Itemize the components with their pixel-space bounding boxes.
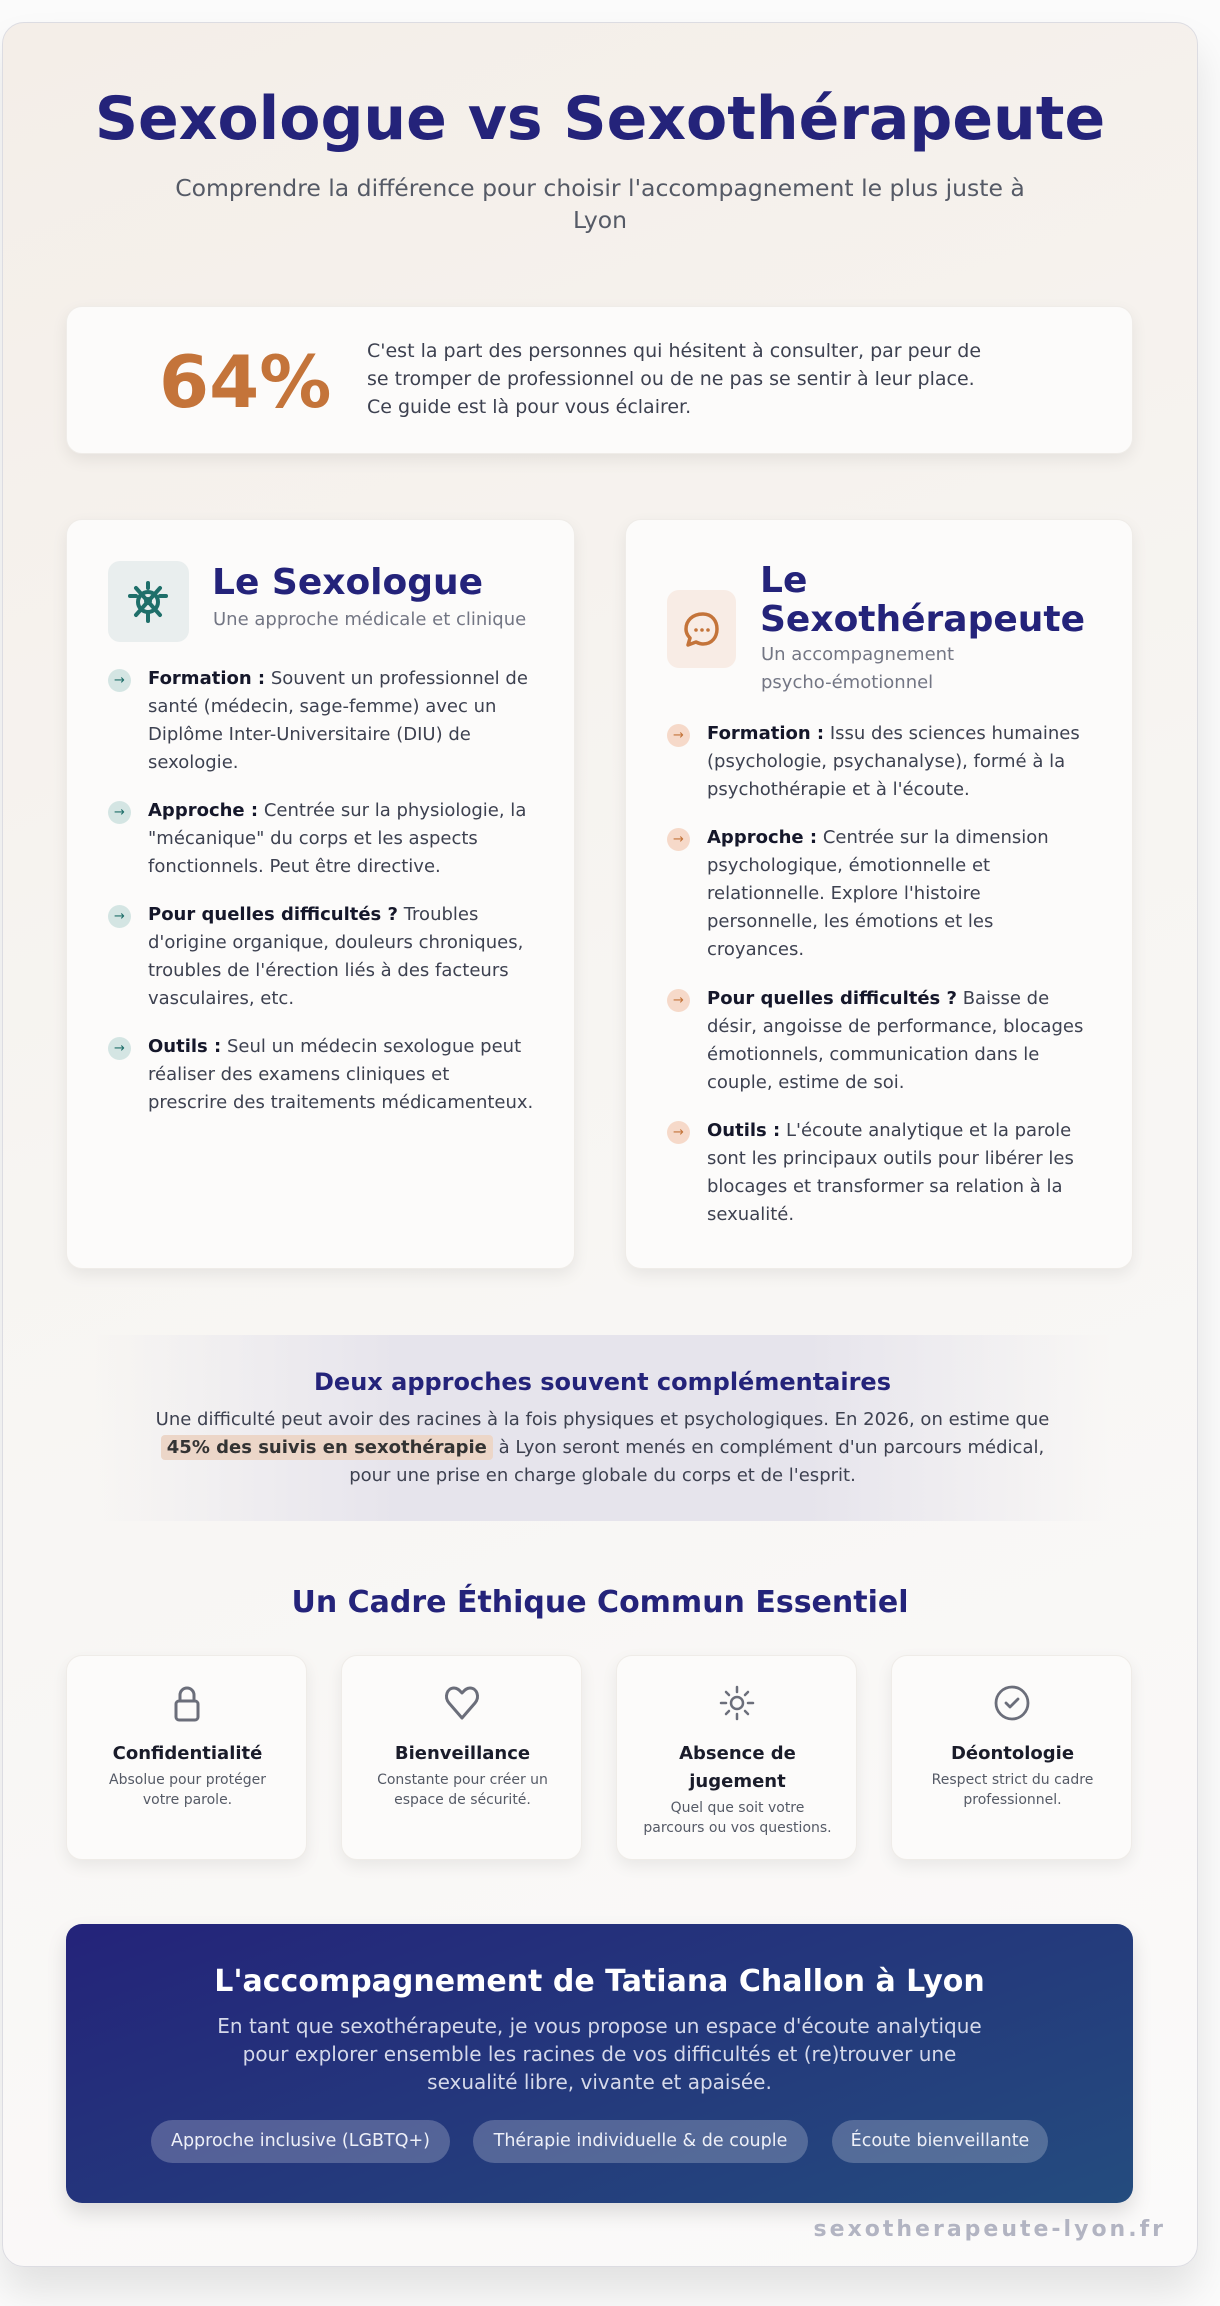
title: Sexologue vs Sexothérapeute xyxy=(95,84,1105,154)
item outils: → xyxy=(673,1125,684,1140)
footer url: sexotherapeute-lyon.fr xyxy=(814,2217,1166,2242)
item outils: → xyxy=(114,1041,125,1056)
pill: therapy xyxy=(473,2120,808,2163)
list xyxy=(108,668,533,1113)
icon: lock xyxy=(174,1686,200,1722)
band text: Une difficulté peut avoir des racines à la fois physiques et psychologiques. En 2026, on estime que 45% des suivis en sexothérapie à Lyon seront menés en complément d'un parcours médical, pour une prise en charge globale du corps et de l'esprit. xyxy=(156,1409,1049,1486)
card: bienveillance xyxy=(341,1655,582,1860)
icon: chat bubble xyxy=(667,590,736,668)
card: deontologie: Déontologie xyxy=(951,1743,1074,1764)
heading: Le Sexologue xyxy=(212,562,483,603)
stat text: C'est la part des personnes qui hésitent à consulter, par peur de xyxy=(367,340,981,362)
pill: listening xyxy=(832,2120,1048,2163)
item difficultes: Pour quelles difficultés ? Baisse de désir, angoisse de performance, blocages émotionnels, communication dans le couple, estime de soi. xyxy=(707,988,1083,1093)
item outils: Outils : L'écoute analytique et la parole sont les principaux outils pour libérer les blocages et transformer sa relation à la sexualité. xyxy=(707,1120,1074,1225)
icon: sun xyxy=(720,1686,754,1720)
item difficultes: Pour quelles difficultés ? Troubles d'origine organique, douleurs chroniques, troubles de l'érection liés à des facteurs vasculaires, etc. xyxy=(148,904,523,1009)
pill: inclusive xyxy=(151,2120,450,2163)
item formation: → xyxy=(114,673,125,688)
card: confidentialite xyxy=(66,1655,307,1860)
item formation: → xyxy=(673,728,684,743)
item formation: Formation : Issu des sciences humaines (psychologie, psychanalyse), formé à la psychothérapie et à l'écoute. xyxy=(707,723,1080,800)
item difficultes: → xyxy=(673,993,684,1008)
item approche: → xyxy=(114,805,125,820)
panel: Le Sexologue xyxy=(66,519,575,1269)
card: absence de jugement xyxy=(616,1655,857,1860)
subtitle: Comprendre la différence pour choisir l'accompagnement le plus juste à Lyon xyxy=(175,174,1025,234)
card: deontologie xyxy=(891,1655,1132,1860)
stat number: 64% xyxy=(159,340,331,424)
heading: ethical frame: Un Cadre Éthique Commun Essentiel xyxy=(291,1585,909,1620)
CTA heading: L'accompagnement de Tatiana Challon à Lyon xyxy=(214,1964,985,1999)
stat text: Ce guide est là pour vous éclairer. xyxy=(367,396,691,418)
item approche: Approche : Centrée sur la dimension psychologique, émotionnelle et relationnelle. Explore l'histoire personnelle, les émotions et les croyances. xyxy=(707,827,1049,960)
item outils: prescrire des traitements médicamenteux. xyxy=(148,1092,533,1113)
card: bienveillance: Constante pour créer un espace de sécurité. xyxy=(377,1772,548,1808)
icon: check circle xyxy=(994,1686,1030,1720)
card: deontologie: Respect strict du cadre professionnel. xyxy=(932,1772,1093,1808)
item outils xyxy=(108,1036,533,1113)
stat box xyxy=(66,306,1133,454)
card: absence de jugement: parcours ou vos questions. xyxy=(643,1820,832,1836)
item approche: → xyxy=(673,832,684,847)
card: absence de jugement: Absence de jugement xyxy=(679,1743,796,1792)
pill: inclusive: Approche inclusive (LGBTQ+) xyxy=(171,2131,430,2151)
item outils: Outils : Seul un médecin sexologue peut réaliser des examens cliniques et xyxy=(148,1036,521,1085)
stat text: se tromper de professionnel ou de ne pas se sentir à leur place. xyxy=(367,368,975,390)
card: bienveillance: Bienveillance xyxy=(395,1743,530,1764)
panel: CTA Tatiana Challon xyxy=(66,1924,1133,2203)
pill: therapy: Thérapie individuelle & de couple xyxy=(494,2131,787,2151)
CTA text: En tant que sexothérapeute, je vous propose un espace d'écoute analytique pour explorer ensemble les racines de vos difficultés et (re)trouver une sexualité libre, vivante et apaisée. xyxy=(217,2014,982,2094)
heading: Le Sexothérapeute xyxy=(760,560,1085,640)
stat text xyxy=(367,340,981,418)
subheading: Une approche médicale et clinique xyxy=(213,609,526,630)
list xyxy=(667,723,1083,1225)
subheading: Un accompagnement psycho-émotionnel xyxy=(761,644,954,693)
item approche: Approche : Centrée sur la physiologie, la "mécanique" du corps et les aspects fonctionnels. Peut être directive. xyxy=(148,800,526,877)
card: absence de jugement: Quel que soit votre xyxy=(671,1800,804,1816)
band heading: Deux approches souvent complémentaires xyxy=(314,1368,891,1396)
item difficultes: → xyxy=(114,909,125,924)
panel: Le Sexothérapeute xyxy=(625,519,1133,1269)
card: confidentialite: Absolue pour protéger votre parole. xyxy=(109,1772,266,1808)
item formation: Formation : Souvent un professionnel de santé (médecin, sage-femme) avec un Diplôme Inter-Universitaire (DIU) de sexologie. xyxy=(148,668,528,773)
pill: listening: Écoute bienveillante xyxy=(851,2131,1029,2151)
icon: heart xyxy=(445,1686,479,1720)
band: complementary approaches xyxy=(95,1335,1110,1521)
card: confidentialite: Confidentialité xyxy=(113,1743,262,1764)
icon: medical virus xyxy=(108,561,189,642)
